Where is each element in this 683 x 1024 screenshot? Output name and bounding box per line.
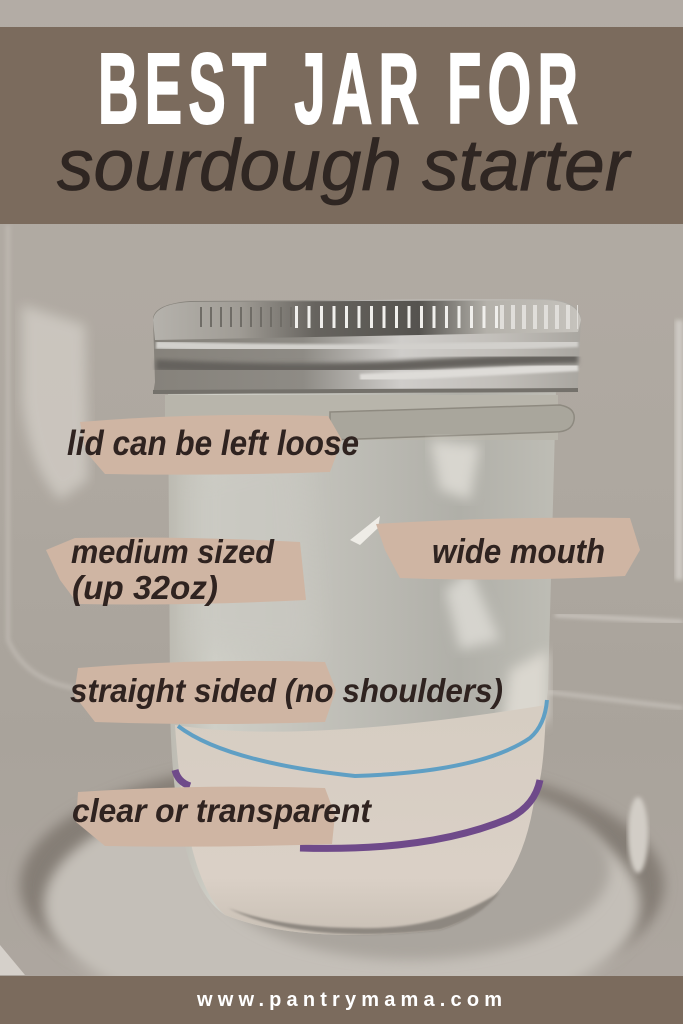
glass neck ring bbox=[330, 405, 574, 440]
title line 1: BEST JAR FOR bbox=[98, 34, 578, 145]
label: wide mouth bbox=[376, 518, 640, 580]
label: clear or transparent: clear or transparent bbox=[72, 792, 373, 829]
top title banner bbox=[0, 27, 683, 224]
label: lid can be left loose bbox=[67, 415, 359, 475]
website url: www.pantrymama.com bbox=[196, 989, 502, 1011]
lid grooves bbox=[156, 343, 578, 348]
jar glass body bbox=[168, 390, 556, 935]
purple rubber band bbox=[175, 770, 540, 848]
lid ridged band bbox=[153, 300, 581, 340]
textured plate mat bbox=[210, 776, 610, 960]
plate dark ring bbox=[20, 757, 664, 1013]
metal lid bbox=[153, 299, 581, 394]
label: wide mouth: wide mouth bbox=[432, 533, 605, 571]
label: medium sized (up 32oz) bbox=[46, 533, 306, 606]
label: straight sided bbox=[70, 661, 503, 724]
blue rubber band bbox=[178, 700, 547, 776]
label: lid can be left loose: lid can be left loose bbox=[67, 424, 359, 463]
title line 2: sourdough starter bbox=[57, 126, 632, 206]
jar bbox=[153, 299, 581, 935]
glass smears bbox=[350, 516, 380, 545]
label: medium sized (up 32oz): medium sized bbox=[71, 533, 275, 570]
glass neck bbox=[165, 395, 558, 440]
label: clear or transparent bbox=[72, 787, 373, 847]
label: medium sized (up 32oz): (up 32oz) bbox=[72, 569, 218, 606]
sourdough starter bbox=[175, 705, 546, 935]
footer banner bbox=[0, 976, 683, 1024]
label: straight sided: straight sided (no shoulders) bbox=[70, 672, 503, 709]
plate surface bbox=[44, 780, 640, 1024]
jar base shadow bbox=[228, 892, 500, 934]
